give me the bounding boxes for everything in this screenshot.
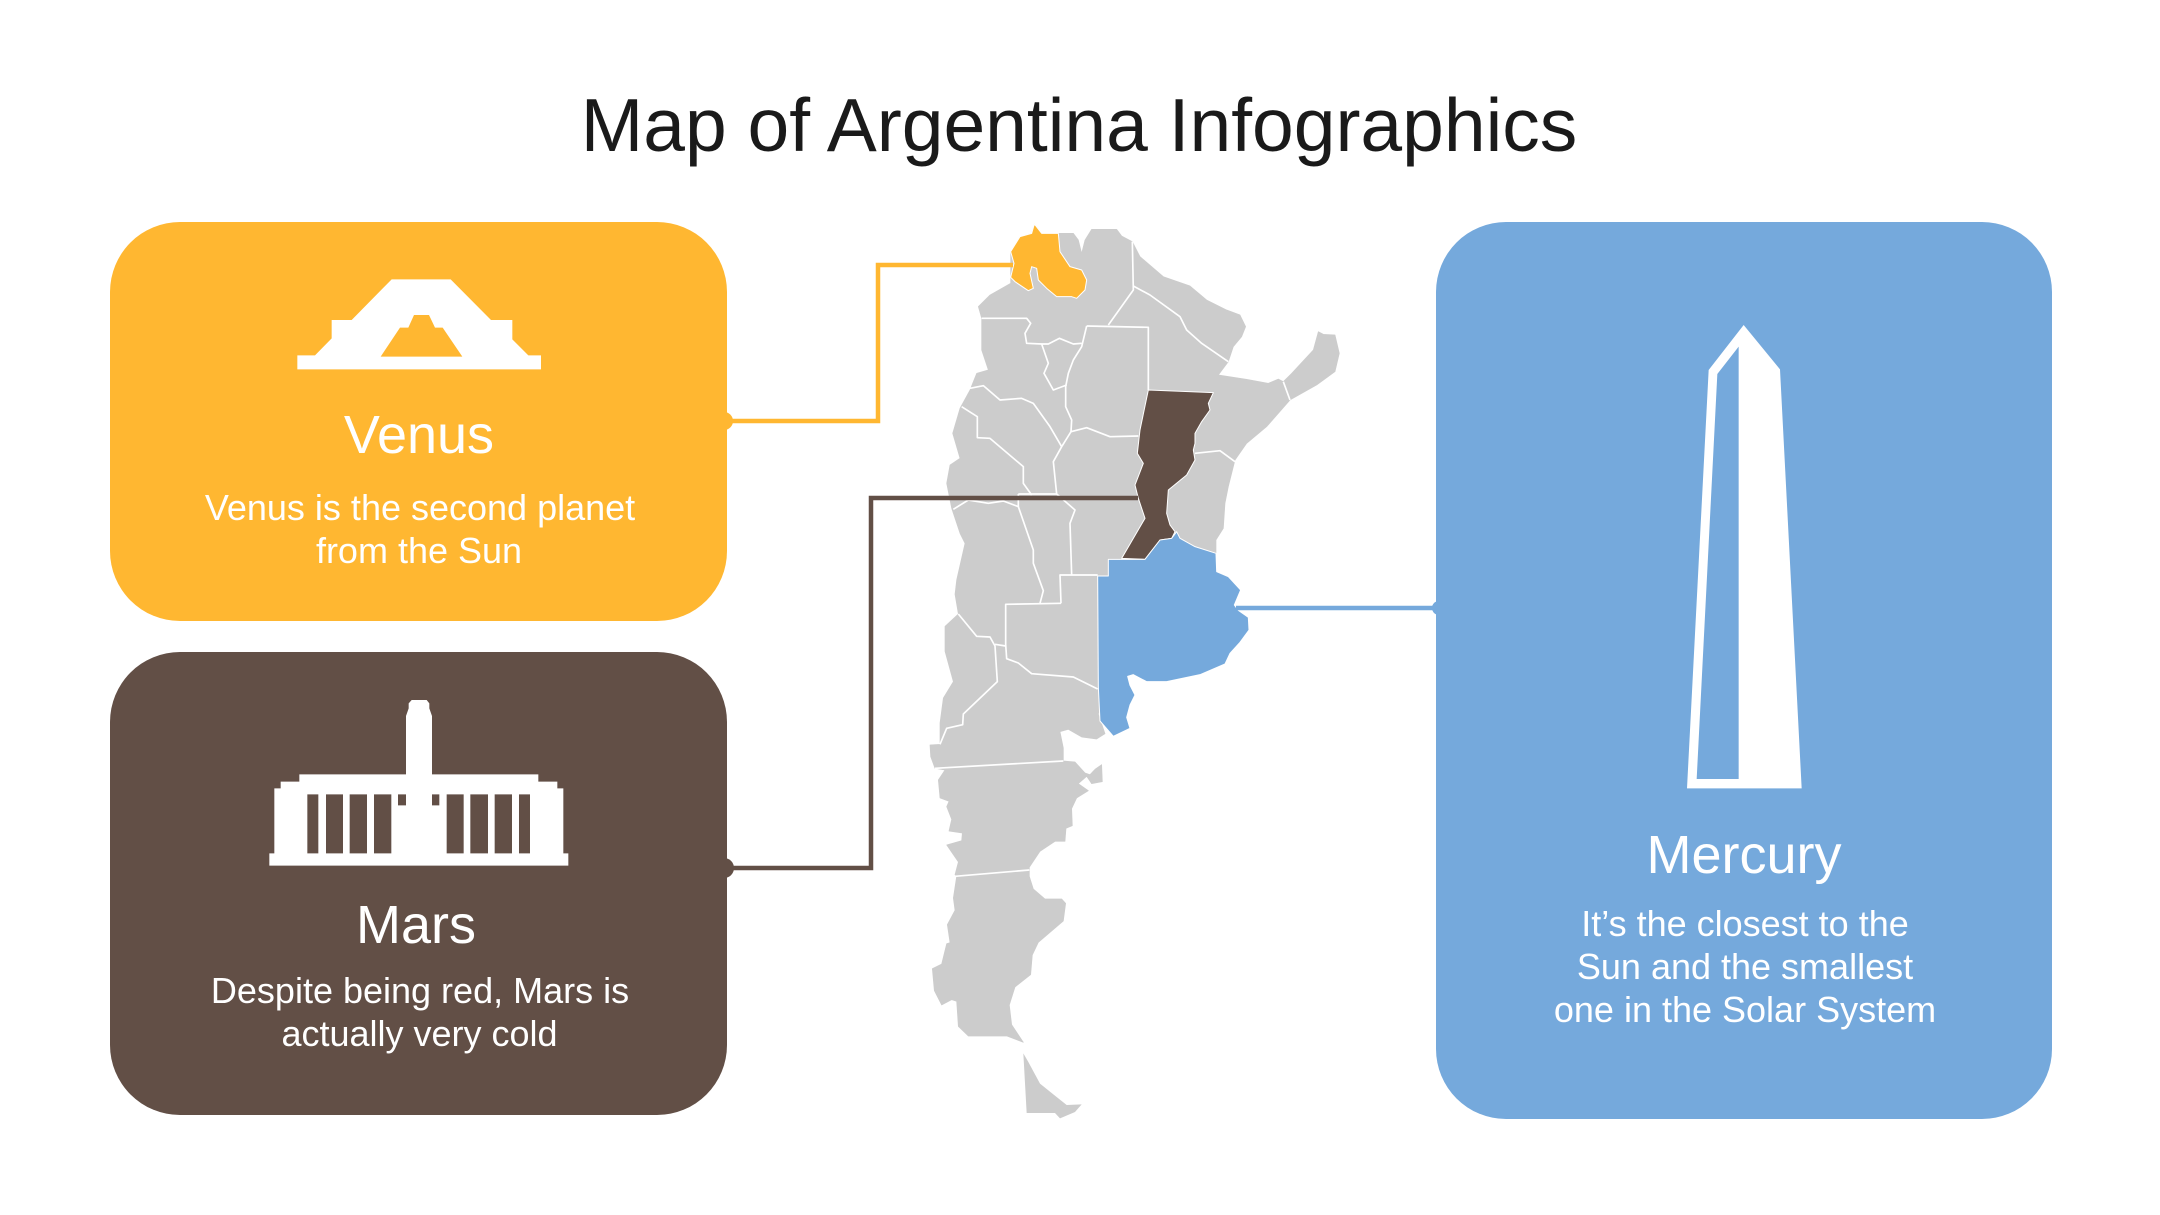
panel: Venus xyxy=(110,222,727,621)
connector: Mars to Santa Fe xyxy=(714,498,1138,878)
heading: Mars: Mars xyxy=(356,895,476,955)
panel: Mercury xyxy=(1436,222,2052,1119)
connector: Venus to Jujuy xyxy=(715,265,1013,430)
text: Mars description: Despite being red, Mars is xyxy=(211,970,629,1011)
icon: government building xyxy=(269,700,568,866)
title: Map of Argentina Infographics xyxy=(581,83,1577,167)
panel: Mars xyxy=(110,652,727,1115)
text: Mercury description: one in the Solar System xyxy=(1554,989,1936,1030)
map: grey provinces xyxy=(930,224,1339,1042)
connector: Mercury to Buenos Aires xyxy=(1236,601,1446,615)
icon: obelisk xyxy=(1687,325,1802,788)
text: Mercury description: It’s the closest to the xyxy=(1581,903,1909,944)
heading: Mercury: Mercury xyxy=(1646,825,1842,885)
map: Buenos Aires highlighted xyxy=(1098,532,1249,736)
heading: Venus: Venus xyxy=(344,405,494,465)
text: Mars description: actually very cold xyxy=(281,1013,558,1054)
text: Venus description: Venus is the second planet xyxy=(205,487,635,528)
map: Tierra del Fuego xyxy=(1023,1053,1082,1118)
icon: pyramid monument xyxy=(297,279,541,369)
map: Jujuy highlighted xyxy=(1011,224,1087,298)
map of Argentina xyxy=(930,224,1339,1118)
map: Santa Fe highlighted xyxy=(1122,390,1213,559)
map: province borders xyxy=(935,242,1290,876)
text: Venus description: from the Sun xyxy=(316,530,522,571)
text: Mercury description: Sun and the smallest xyxy=(1577,946,1913,987)
